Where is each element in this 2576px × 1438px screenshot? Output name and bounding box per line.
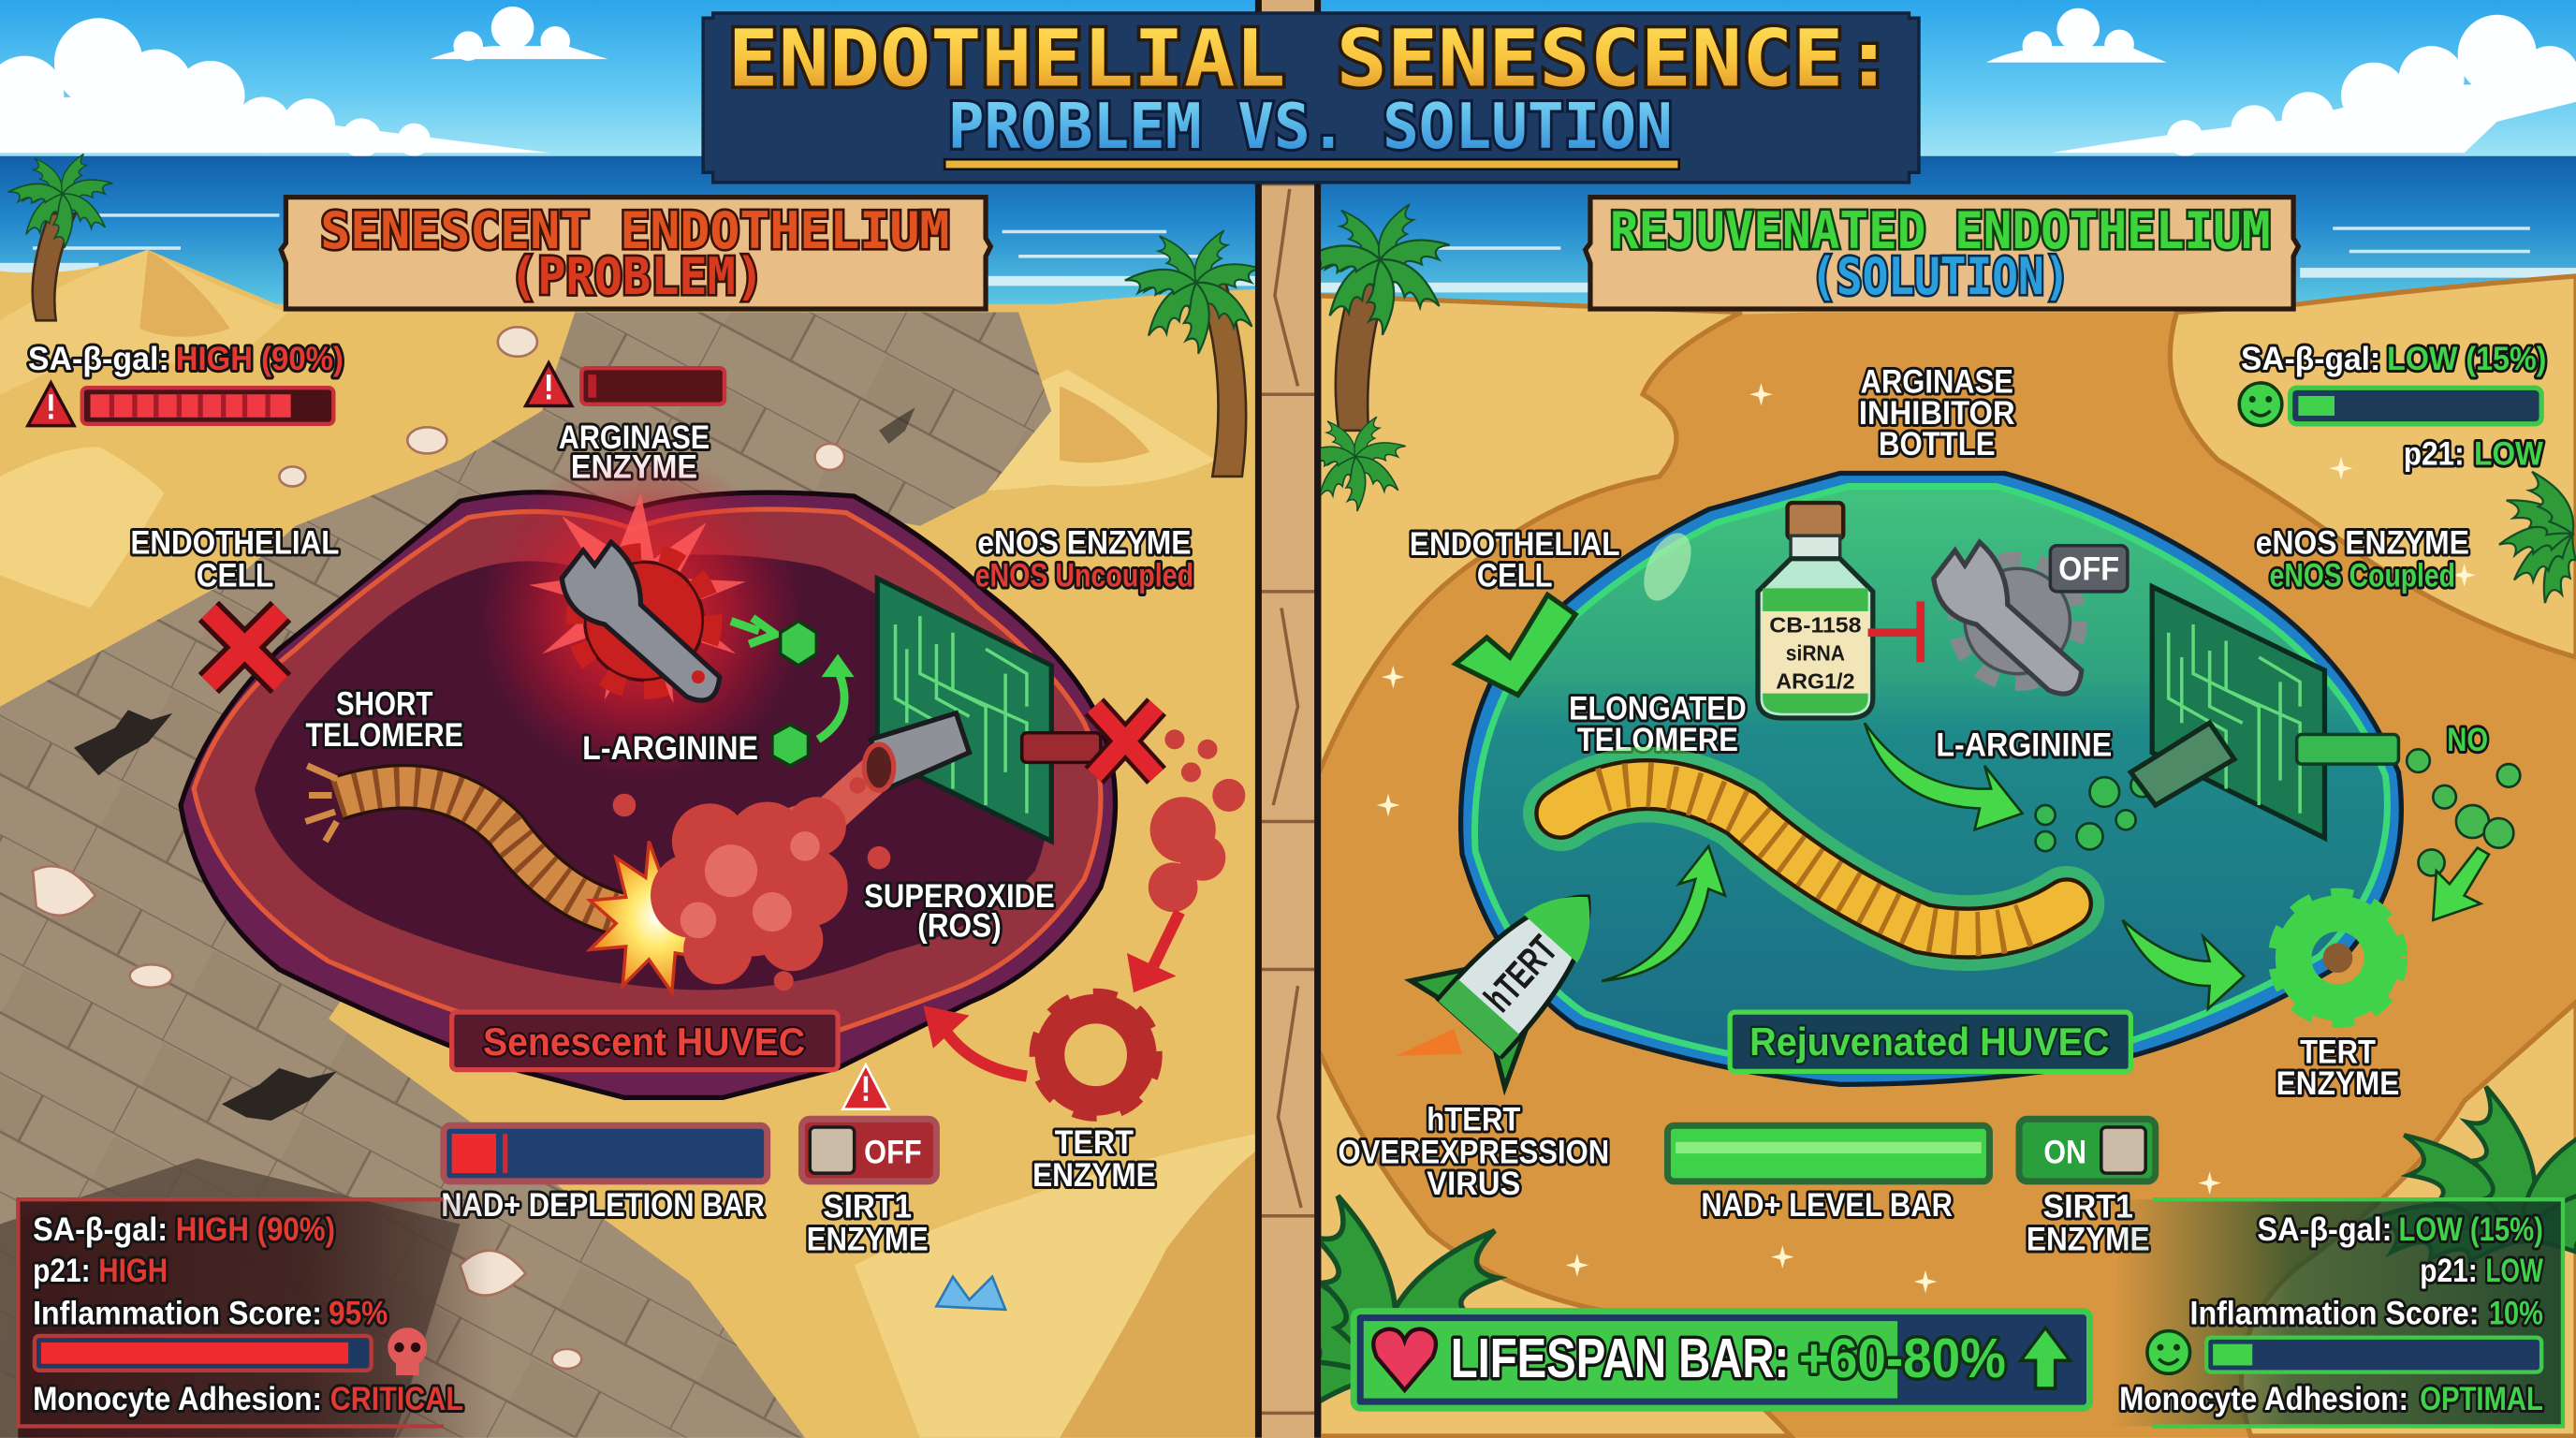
label: senescent HUVEC [452, 1012, 838, 1070]
palm tree: far left [7, 150, 115, 320]
label: eNOS coupled [2256, 524, 2469, 594]
right ROS smoke with arrow [1127, 729, 1245, 992]
label: elongated telomere: TELOMERE [1577, 722, 1738, 758]
label: hTERT virus: VIRUS [1427, 1166, 1520, 1202]
label: SIRT1 left: ENZYME [807, 1222, 929, 1258]
label: hTERT virus: OVEREXPRESSION [1339, 1135, 1609, 1171]
foliage: bottom corners [1189, 1083, 2576, 1428]
label: NO: NO [2447, 722, 2488, 758]
panel: rejuvenated stats: p21: [2420, 1253, 2478, 1289]
label: endothelial cell left [131, 524, 339, 594]
central stone wall divider [1255, 0, 1321, 1438]
L-arginine dots [2036, 774, 2154, 851]
label: arginase inhibitor bottle: INHIBITOR [1859, 395, 2015, 432]
arginase level meter [526, 363, 724, 406]
panel: senescent stats: CRITICAL [330, 1381, 463, 1417]
label: TERT enzyme left: TERT [1055, 1124, 1134, 1161]
label: TERT enzyme right: TERT [2300, 1034, 2376, 1071]
title: subtitle: PROBLEM VS. SOLUTION [948, 90, 1673, 163]
icon: smiley [2239, 383, 2282, 426]
banner: problem heading [281, 198, 990, 309]
label: endothelial cell right [1410, 526, 1620, 594]
icon: warning above switch [842, 1064, 889, 1109]
NAD+ depletion bar [444, 1125, 768, 1181]
top-left SA-β-gal status: HIGH (90%) [176, 341, 344, 377]
top-right SA-β-gal status: p21: [2404, 436, 2465, 473]
NO dots [2407, 749, 2520, 875]
SIRT1 on switch [2019, 1119, 2156, 1181]
icon: up arrow [2021, 1328, 2070, 1388]
label: NAD+ level: NAD+ LEVEL BAR [1701, 1187, 1953, 1224]
label: endothelial cell right: ENDOTHELIAL [1410, 526, 1620, 563]
label: eNOS uncoupled: eNOS ENZYME [977, 524, 1191, 561]
panel: senescent stats: Inflammation Score: [33, 1296, 322, 1332]
clouds [0, 7, 2576, 157]
icon: smiley [2147, 1331, 2190, 1373]
panel: lifespan bar: +60-80% [1799, 1327, 2006, 1389]
SIRT1 off switch [801, 1119, 936, 1181]
label: NAD+ depletion: NAD+ DEPLETION BAR [441, 1187, 765, 1224]
green arrow telomere to gear [2123, 920, 2244, 1009]
label: arginase enzyme: ENZYME [571, 449, 697, 486]
label: eNOS uncoupled [975, 524, 1193, 594]
explosion burst [590, 842, 724, 992]
label: senescent HUVEC: Senescent HUVEC [483, 1020, 805, 1064]
icon: green checkmark [1456, 594, 1575, 695]
icon: CB-1158 inhibitor bottle: ARG1/2 [1776, 668, 1855, 693]
background: ocean [0, 156, 2576, 304]
label: endothelial cell left: ENDOTHELIAL [131, 524, 339, 561]
panel: senescent stats: p21: [33, 1253, 91, 1289]
label: elongated telomere [1569, 691, 1747, 758]
panel: rejuvenated stats: Inflammation Score: [2190, 1296, 2479, 1332]
label: SIRT1 right: SIRT1 [2042, 1189, 2133, 1225]
green arrow rocket to telomere [1602, 846, 1725, 981]
small green arrow and L-arginine hexagons [731, 618, 855, 766]
label: eNOS uncoupled: eNOS Uncoupled [975, 558, 1193, 594]
label: eNOS coupled: eNOS Coupled [2270, 558, 2455, 594]
panel: rejuvenated stats: LOW [2485, 1253, 2544, 1289]
icon: inactive grey gear and wrench [1934, 542, 2128, 694]
ground: cracked stone path [0, 312, 1051, 1438]
icon: arginase gear and wrench with red glow [476, 452, 805, 781]
label: arginase inhibitor bottle: ARGINASE [1861, 363, 2013, 400]
inflammation bar [2206, 1338, 2541, 1372]
label: TERT enzyme left: ENZYME [1032, 1157, 1156, 1194]
panel: rejuvenated endothelial cell [1461, 473, 2401, 1084]
banner: solution heading [1586, 198, 2298, 309]
panel: senescent stats: SA-β-gal: [33, 1211, 168, 1248]
green arrow to L-arginine [1865, 723, 2023, 829]
panel: senescent stats: HIGH (90%) [176, 1211, 335, 1248]
panel: senescent stats: HIGH [98, 1253, 168, 1289]
label: arginase inhibitor bottle [1859, 363, 2015, 462]
icon: hTERT rocket: hTERT [1475, 927, 1566, 1020]
panel: senescent stats: 95% [329, 1296, 388, 1332]
top-left SA-β-gal status [28, 341, 344, 426]
icon: uncoupled eNOS circuit board [864, 579, 1101, 842]
foliage: right edge [2499, 463, 2576, 609]
panel: senescent stats [18, 1199, 493, 1438]
label: hTERT virus: hTERT [1427, 1102, 1521, 1138]
panel: rejuvenated stats: 10% [2489, 1296, 2543, 1332]
background: sky [0, 0, 2576, 165]
banner: problem heading: (PROBLEM) [509, 247, 764, 306]
label: short telomere: TELOMERE [305, 717, 463, 754]
label: short telomere: SHORT [336, 685, 433, 722]
title underline [944, 159, 1679, 169]
top-right SA-β-gal status: LOW (15%) [2387, 341, 2546, 377]
ground: left sand [0, 250, 1257, 1438]
icon: CB-1158 inhibitor bottle: CB-1158 [1769, 613, 1862, 638]
icon: red X [209, 611, 281, 683]
top-right SA-β-gal status: SA-β-gal: [2241, 341, 2380, 377]
title: main: ENDOTHELIAL SENESCENCE: [728, 12, 1895, 104]
SIRT1 on switch: ON [2043, 1135, 2086, 1171]
panel: lifespan bar: LIFESPAN BAR: [1451, 1327, 1789, 1389]
label: arginase enzyme [559, 419, 710, 486]
foam [0, 213, 2576, 292]
top-right SA-β-gal status: LOW [2474, 436, 2544, 473]
left dunes [0, 250, 1257, 1438]
banner: problem heading: SENESCENT ENDOTHELIUM [320, 201, 949, 260]
sparkles on sand [1377, 383, 2476, 1293]
panel: lifespan bar [1354, 1312, 2089, 1408]
panel: rejuvenated stats: LOW (15%) [2398, 1211, 2543, 1248]
label: L-arginine right: L-ARGININE [1936, 726, 2112, 763]
green arrow to TERT gear [2433, 848, 2489, 920]
NAD+ level bar [1667, 1125, 1989, 1181]
label: superoxide: (ROS) [917, 907, 1002, 944]
banner: solution heading: (SOLUTION) [1810, 247, 2070, 306]
panel: rejuvenated stats [2111, 1199, 2563, 1426]
label: hTERT virus [1339, 1102, 1609, 1202]
label: endothelial cell right: CELL [1477, 558, 1553, 594]
label: superoxide [864, 878, 1055, 944]
label: TERT enzyme left [1032, 1124, 1156, 1194]
short frayed telomere [305, 766, 633, 917]
panel: rejuvenated stats: Monocyte Adhesion: [2119, 1381, 2408, 1417]
icon: CB-1158 inhibitor bottle [1758, 503, 1873, 718]
label: elongated telomere: ELONGATED [1569, 691, 1747, 727]
icon: hTERT rocket [1367, 846, 1636, 1124]
ground: right sand base [1319, 276, 2576, 1438]
icon: coupled eNOS circuit board [2130, 587, 2398, 838]
top-right SA-β-gal status [2239, 341, 2546, 473]
title banner [703, 12, 1919, 183]
palm tree: left panel right [1123, 226, 1265, 477]
label: TERT enzyme right: ENZYME [2276, 1065, 2399, 1102]
top-left SA-β-gal status: SA-β-gal: [28, 341, 169, 377]
label: eNOS coupled: eNOS ENZYME [2256, 524, 2469, 561]
superoxide smoke cloud [613, 753, 890, 990]
label: arginase enzyme: ARGINASE [559, 419, 710, 456]
icon: green TERT gear [2276, 896, 2400, 1020]
panel: senescent endothelial cell [181, 492, 1116, 1097]
label: TERT enzyme right [2276, 1034, 2399, 1102]
label: superoxide: SUPEROXIDE [864, 878, 1055, 915]
inflammation bar [35, 1336, 372, 1371]
icon: inactive grey gear and wrench: OFF [2058, 551, 2119, 588]
icon: skull [388, 1328, 427, 1375]
elongated gold telomere [1560, 785, 2067, 934]
label: SIRT1 left: SIRT1 [823, 1189, 912, 1225]
label: L-arginine left: L-ARGININE [582, 730, 758, 767]
label: arginase inhibitor bottle: BOTTLE [1879, 426, 1996, 462]
icon: broken TERT gear [1036, 996, 1155, 1114]
label: short telomere [305, 685, 463, 754]
banner: solution heading: REJUVENATED ENDOTHELIUM [1610, 201, 2271, 260]
label: SIRT1 right: ENZYME [2027, 1222, 2150, 1258]
icon: heart [1373, 1329, 1436, 1390]
icon: CB-1158 inhibitor bottle: siRNA [1786, 641, 1845, 666]
label: rejuvenated HUVEC: Rejuvenated HUVEC [1749, 1020, 2110, 1064]
panel: rejuvenated stats: OPTIMAL [2420, 1381, 2543, 1417]
label: SIRT1 right [2027, 1189, 2150, 1258]
icon: red X on NO output [1094, 707, 1157, 775]
right light sand patches [1319, 276, 2576, 1436]
palm tree: right panel left [1299, 198, 1453, 512]
panel: rejuvenated stats: SA-β-gal: [2258, 1211, 2392, 1248]
panel: senescent stats: Monocyte Adhesion: [33, 1381, 322, 1417]
red arrow to cell [923, 1005, 1027, 1077]
label: endothelial cell left: CELL [197, 558, 273, 594]
shells [33, 327, 1005, 1369]
label: SIRT1 left [807, 1189, 929, 1258]
SIRT1 off switch: OFF [864, 1135, 922, 1171]
inhibition T-bar [1868, 601, 1921, 662]
icon: warning [28, 383, 74, 426]
